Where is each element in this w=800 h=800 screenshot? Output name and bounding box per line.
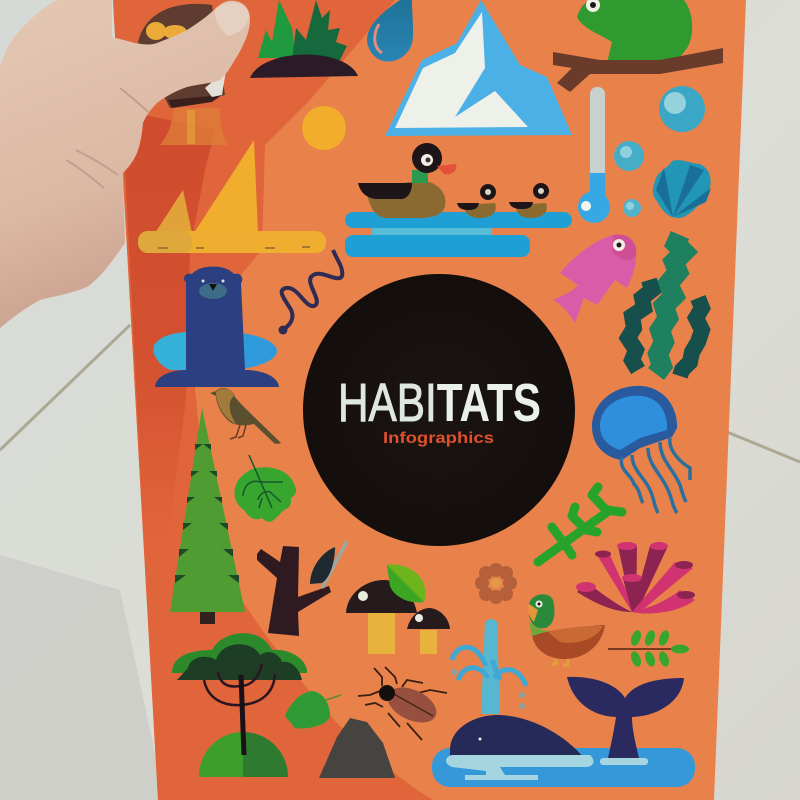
icon: water spout: [451, 619, 526, 714]
icon: water drop: [367, 0, 413, 62]
icon: thermometer: [578, 87, 610, 223]
title disc: Infographics: [383, 430, 494, 447]
icon: pink coral: [576, 542, 695, 614]
icon: seashell: [653, 160, 711, 218]
icon: mallard duck: [528, 594, 605, 665]
icon: brown flower: [475, 563, 517, 604]
icon: duck family on water: [345, 143, 572, 257]
icon: whale and water: [432, 715, 695, 787]
icon: mushrooms: [346, 564, 450, 654]
icon: green leaf: [234, 455, 296, 522]
icon: small bird: [210, 388, 281, 444]
icon: rock: [319, 718, 395, 778]
icon: otter: [153, 266, 279, 387]
icon: sun: [302, 106, 346, 150]
icon: acacia tree: [172, 633, 307, 777]
icon: whale tail: [567, 677, 684, 758]
icon: pink fish: [553, 234, 636, 323]
book cover: [113, 0, 746, 800]
icon: bubble small: [623, 199, 641, 217]
icon: jellyfish: [592, 386, 690, 513]
icon: green sprig: [608, 629, 689, 668]
icon: mountains / desert: [138, 140, 326, 253]
icon: small green leaf: [285, 691, 341, 728]
icon: fir tree: [170, 408, 245, 624]
icon: bubble large: [659, 86, 705, 132]
icon: nest top left: [138, 4, 226, 108]
icon: bubble medium: [614, 141, 644, 171]
hand holding book: [0, 0, 250, 328]
icon: beetle: [358, 667, 447, 740]
icon: grass tuft: [250, 0, 358, 78]
icon: iceberg: [385, 0, 572, 136]
icon: green seaweed: [628, 235, 702, 376]
title disc: HABITATS: [338, 373, 541, 433]
title disc: [303, 274, 575, 546]
icon: faint tree trunk: [160, 108, 228, 145]
icon: snake line: [278, 250, 342, 334]
icon: tree stump with leaf: [257, 541, 347, 636]
icon: green coral branch: [538, 487, 622, 562]
icon: frog on branch: [553, 0, 723, 92]
